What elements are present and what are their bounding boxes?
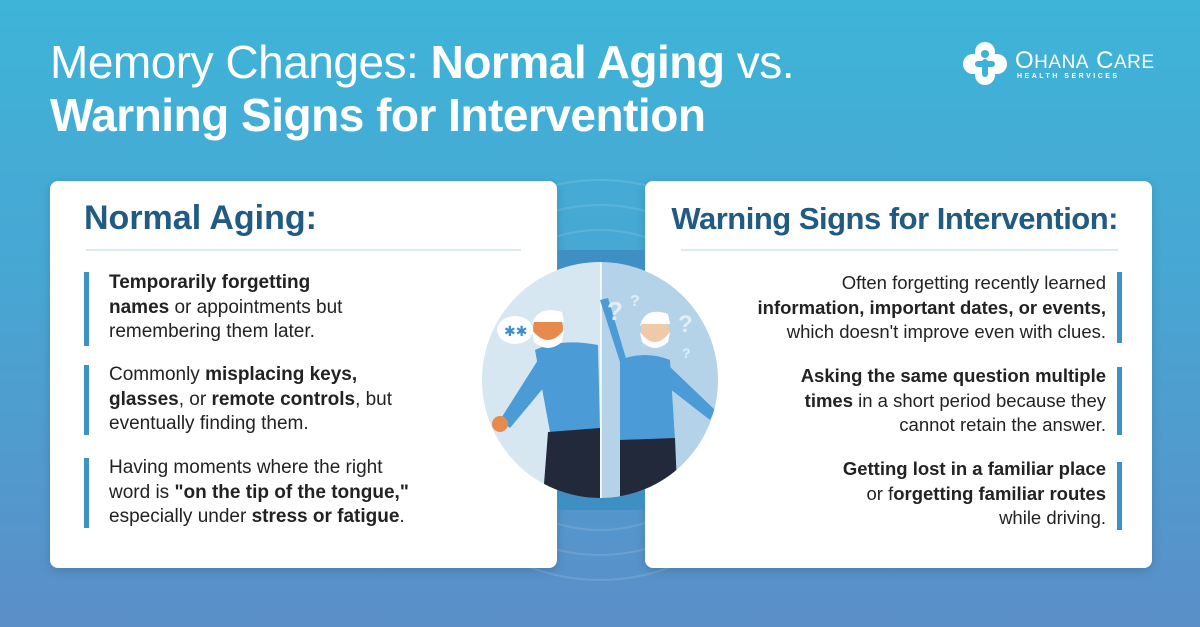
panel: warning signs: information, important dates, or events, xyxy=(758,296,1106,318)
panel: normal aging: word is "on the tip of the tongue," xyxy=(109,482,409,502)
title xyxy=(50,36,794,141)
illustration: two elderly men: ? xyxy=(607,296,623,326)
title: Memory Changes: Normal Aging vs. xyxy=(50,36,794,88)
title: Warning Signs for Intervention xyxy=(50,89,705,141)
logo: OHANA CARE xyxy=(1015,47,1155,74)
item 2 xyxy=(84,364,392,435)
panel: warning signs: Getting lost in a familiar place xyxy=(843,458,1106,479)
logo xyxy=(963,42,1155,85)
illustration: two elderly men: ✱✱ xyxy=(504,324,527,340)
panel: warning signs: times in a short period because they xyxy=(805,390,1106,410)
panel: warning signs xyxy=(645,181,1152,568)
panel: normal aging: eventually finding them. xyxy=(109,413,309,434)
item 2 xyxy=(801,365,1122,435)
panel: warning signs: cannot retain the answer. xyxy=(899,414,1106,435)
panel: warning signs: Often forgetting recently learned xyxy=(842,272,1106,293)
panel: normal aging: names or appointments but xyxy=(109,296,342,318)
panel: warning signs: which doesn't improve even with clues. xyxy=(787,321,1106,342)
panel: warning signs: Asking the same question multiple xyxy=(801,365,1106,386)
heading: normal aging: Normal Aging: xyxy=(84,199,317,237)
panel: normal aging: glasses, or remote controls, but xyxy=(109,388,392,410)
item 3 xyxy=(84,457,409,528)
right man xyxy=(620,355,675,442)
illustration: two elderly men xyxy=(482,250,718,510)
panel: normal aging xyxy=(50,181,557,568)
panel: normal aging: Temporarily forgetting xyxy=(109,272,310,293)
illustration: two elderly men: ? xyxy=(630,293,640,310)
panel: normal aging: Commonly misplacing keys, xyxy=(109,364,357,385)
item 3 xyxy=(843,458,1122,530)
panel: normal aging: Having moments where the right xyxy=(109,457,383,478)
logo: HEALTH SERVICES xyxy=(1017,73,1120,80)
illustration: two elderly men: ? xyxy=(678,311,693,338)
panel: warning signs: or forgetting familiar routes xyxy=(866,482,1106,504)
panel: normal aging: especially under stress or fatigue. xyxy=(109,506,405,527)
left man xyxy=(535,342,600,432)
heading: warning signs: Warning Signs for Intervention: xyxy=(671,201,1118,236)
panel: warning signs: while driving. xyxy=(999,507,1106,528)
item 1 xyxy=(758,272,1122,343)
item 1 xyxy=(84,272,342,346)
illustration: two elderly men: ? xyxy=(682,345,691,361)
panel: normal aging: remembering them later. xyxy=(109,321,315,342)
